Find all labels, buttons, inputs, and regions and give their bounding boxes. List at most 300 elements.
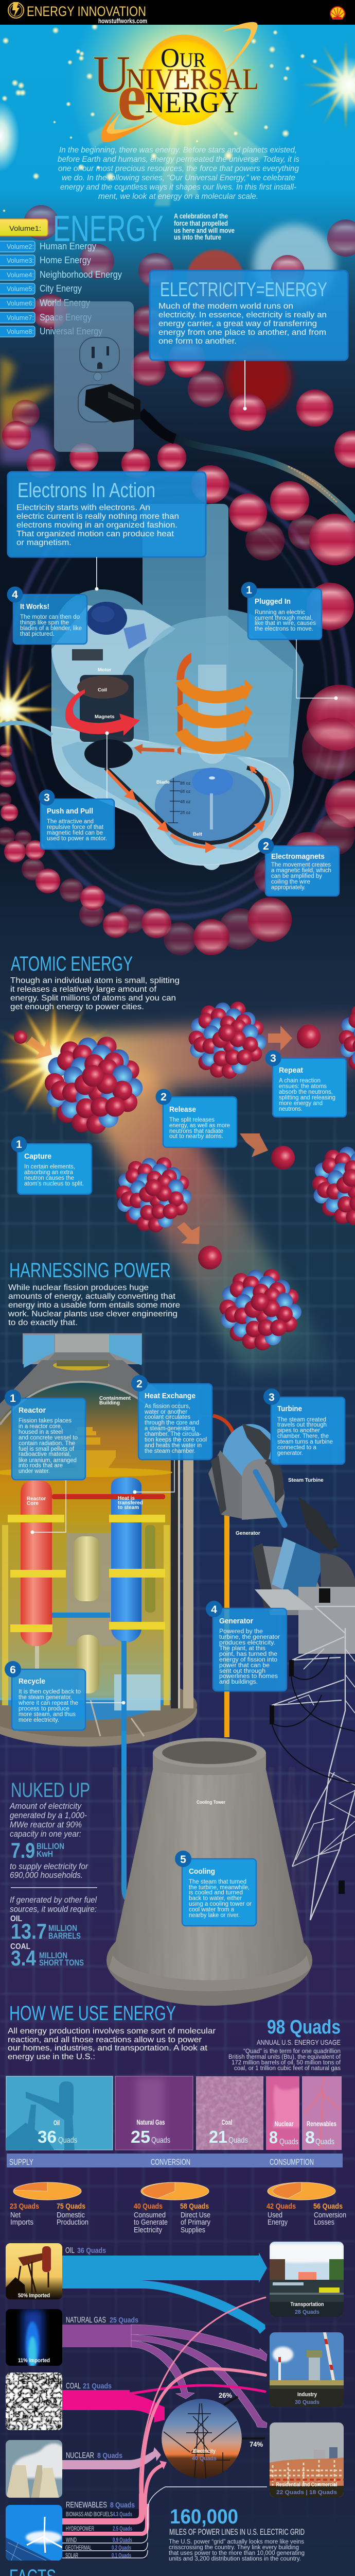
callout: turbine: connected to a [277, 1445, 317, 1451]
generator [252, 1497, 355, 1654]
callout: generator: produces electricity. [219, 1640, 275, 1646]
callout: plugged in: the electrons to move. [255, 626, 313, 632]
energy tagline: us into the future [174, 233, 221, 241]
blender illustration: 6fl oz [180, 789, 190, 794]
how we use energy text: reaction, and all those reactions allow us to power [8, 2036, 202, 2044]
callout: it works [7, 586, 87, 644]
callout: generator: power that can be [219, 1663, 270, 1669]
pie chart: consumption [267, 2182, 346, 2227]
callout: cooling: The steam that turned [189, 1879, 246, 1885]
callout: plugged in: 1 [246, 584, 252, 596]
intro text: ment, we look at energy on a molecular scale. [98, 192, 258, 201]
stat: 98 quads: 172 million barrels of oil, 50 million tons of [232, 2060, 341, 2066]
volume list: Volume6: [7, 299, 34, 307]
callout: generator: The plant, at this [219, 1646, 265, 1652]
photo: electricity: 74% [250, 2440, 263, 2448]
panel: electrons in action: Electrons In Action [17, 479, 155, 502]
volume list: Volume3: [7, 257, 34, 264]
callout: electromagnets: Electromagnets [271, 852, 325, 861]
intro text [58, 146, 299, 201]
plant part labels: Steam Turbine [288, 1478, 324, 1483]
intro text: before Earth and humans, energy permeated the universe. Today, it is [58, 155, 299, 164]
panel: nuked up: COAL [10, 1942, 30, 1951]
photo: residential and commercial: Residential and Commercial [276, 2482, 338, 2488]
atomic energy text [10, 976, 180, 1011]
orange coil arrows [176, 653, 253, 752]
nucleus 2 [188, 1002, 267, 1079]
callout: generator: powerlines to homes [219, 1673, 278, 1680]
callout: turbine: travels out through [277, 1422, 327, 1428]
blender part labels: Magnets [95, 714, 115, 720]
title text: NERGY [145, 86, 239, 119]
volume list: Space Energy [40, 312, 92, 323]
blender part labels: Blade [156, 779, 170, 785]
panel: electrons in action: electrons moving in an organized fashion. [16, 521, 177, 530]
callout: cooling: the turbine, meanwhile, [189, 1885, 250, 1891]
panel: electrons in action: Electricity starts with electrons. An [16, 503, 150, 512]
plant part labels: Reactor [27, 1496, 46, 1502]
renewables breakdown labels: BIOMASS AND BIOFUELS [66, 2511, 113, 2518]
label: cooling tower: Cooling Tower [197, 1800, 225, 1805]
callout: push and pull: repulsive force of that [47, 824, 104, 831]
callout: turbine: chamber. There, the [277, 1433, 329, 1439]
pie chart: supply [10, 2182, 88, 2227]
panel: electrons in action: electric current is really nothing more than [16, 512, 179, 521]
atomic energy text: get enough energy to power cities. [10, 1003, 144, 1011]
icon: energy innovation logo [8, 2, 24, 18]
volume list: Human Energy [40, 241, 96, 251]
bar: renewables: Renewables [307, 2120, 336, 2128]
bar: oil: 36 [38, 2127, 57, 2146]
photo: gas flame [6, 2309, 62, 2369]
flow: oil [62, 2252, 267, 2334]
heading: atomic energy: ATOMIC ENERGY [11, 953, 133, 975]
wire arc copper strands [288, 466, 337, 502]
callout: reactor: like uranium, arranged [19, 1458, 77, 1464]
how we use energy text: energy use in the U.S.: [8, 2053, 95, 2061]
neutron incoming [14, 1030, 27, 1044]
callout: repeat: A chain reaction [279, 1078, 321, 1084]
volume list: Home Energy [40, 255, 91, 265]
bar: coal: Quads [228, 2136, 248, 2145]
title text: O [161, 43, 180, 73]
callout: push and pull [39, 789, 114, 849]
harnessing power text: While nuclear fission produces huge [8, 1283, 149, 1292]
callout: capture: neutron causes the [24, 1175, 74, 1181]
renewables breakdown labels: GEOTHERMAL [65, 2544, 92, 2551]
harnessing power text: amounts of energy, actually converting that [8, 1292, 176, 1301]
callout: repeat: 3 [270, 1053, 276, 1064]
category band [7, 2154, 343, 2167]
stat: 98 quads: British thermal units (Btu), the equivalent of [228, 2054, 341, 2060]
flow: nuclear [62, 2447, 161, 2469]
blender part labels [95, 667, 203, 837]
title text: UR [180, 48, 206, 72]
stat: 98 quads: “Quad” is the term for one quadrillion [243, 2048, 341, 2055]
title text: NIVERSAL [126, 62, 259, 96]
bar: nuclear [266, 2076, 304, 2150]
energy tagline: A celebration of the [174, 212, 228, 220]
volume list: Neighborhood Energy [40, 269, 122, 280]
photo: electricity: 40 Quads [192, 2455, 217, 2462]
photo: transportation: 28 Quads [295, 2309, 319, 2315]
plant part labels: Core [27, 1501, 39, 1506]
photo: coal [6, 2372, 62, 2430]
photo: oil well [6, 2243, 62, 2299]
callout: recycle: Recycle [19, 1677, 45, 1686]
pie chart: conversion: Electricity [134, 2226, 162, 2234]
photo: electricity: Electricity [193, 2448, 216, 2454]
volume list: City Energy [40, 283, 82, 294]
panel: nuked up: 7.9 [11, 1838, 35, 1862]
header bar: howstuffworks.com [98, 17, 147, 25]
renewables breakdown labels: 0.1 Quads [112, 2552, 131, 2559]
bar: oil: Oil [54, 2119, 60, 2127]
photo: residential and commercial: 22 Quads | 18 Quads [276, 2489, 337, 2496]
sankey source labels: RENEWABLES [66, 2501, 107, 2510]
callout: reactor: under water. [19, 1468, 50, 1475]
panel: electrons in action: That organized motion can produce heat [16, 530, 174, 538]
callout: electromagnets [258, 838, 339, 896]
blender part labels: Coil [98, 687, 107, 693]
leader line to wire [296, 639, 338, 700]
callout: it works: blades of a blender, like [20, 625, 82, 632]
leader line to reactor core [31, 1480, 66, 1534]
stat: 160,000 miles of power lines: crisscrossing the country. They link every building [169, 2545, 299, 2551]
callout: generator: point, has turned the [219, 1651, 277, 1657]
panel: electricity=energy: Much of the modern world runs on [158, 302, 293, 311]
callout: turbine [263, 1388, 345, 1464]
callout: recycle: more steam, and thus [19, 1711, 76, 1718]
panel: electricity=energy: electricity. In essence, electricity is really an [158, 311, 327, 319]
callout: cooling: cool water from a [189, 1907, 235, 1913]
chain reaction light bands [51, 1018, 355, 1370]
panel: nuked up [9, 1779, 97, 1970]
cord and spark [0, 657, 59, 761]
bar: natural gas [115, 2076, 193, 2150]
callout: cooling [175, 1851, 256, 1926]
callout: generator: energy of fission into [219, 1657, 277, 1663]
sankey source labels: OIL [65, 2246, 75, 2255]
callout: push and pull: used to power a motor. [47, 836, 107, 842]
callout: electromagnets: 2 [263, 840, 269, 852]
callout: electromagnets: The movement creates [271, 862, 331, 868]
callout: it works: 4 [12, 589, 18, 601]
callout: repeat: splitting and releasing [279, 1095, 335, 1101]
callout: heat exchange: the steam chamber. [145, 1448, 196, 1454]
callout: reactor: housed in a steel [19, 1429, 63, 1435]
bar: oil: Quads [58, 2136, 77, 2145]
leader line to steam generator [133, 1460, 174, 1494]
callout: turbine: pipes to another [277, 1428, 320, 1434]
how we use energy text: our homes, industries, and transportation. A look at [8, 2044, 208, 2053]
callout: heat exchange: coolant circulates [145, 1414, 190, 1420]
category band: SUPPLY [9, 2157, 33, 2167]
panel: nuked up: 690,000 households. [10, 1870, 83, 1880]
leader line to pipe [85, 1701, 126, 1704]
renewables breakdown labels: 2.5 Quads [113, 2525, 132, 2532]
pie chart: supply: 23 Quads [10, 2202, 39, 2211]
header bar: ENERGY INNOVATION [27, 4, 146, 19]
callout: repeat: neutrons. [279, 1106, 303, 1112]
callout: turbine: 3 [269, 1392, 275, 1403]
pie chart: conversion: 58 Quads [180, 2202, 209, 2211]
renewables breakdown labels: 4.3 Quads [113, 2511, 132, 2518]
plant part labels: Generator [236, 1531, 260, 1536]
volume list: Volume1: [9, 224, 41, 232]
callout: reactor: into rods that are [19, 1463, 63, 1469]
colored light at left edge [0, 355, 57, 464]
callout: heat exchange: As fission occurs, [145, 1403, 190, 1410]
photo: gas flame: 11% Imported [18, 2358, 50, 2364]
nucleus 3 [339, 1001, 355, 1078]
sankey source labels: 8 Quads [110, 2501, 135, 2510]
callout: reactor: Reactor [19, 1406, 46, 1415]
callout: heat exchange: and heats the water in [145, 1443, 202, 1449]
panel: electricity=energy: energy carrier, a great way of transferring [158, 319, 317, 328]
plant part labels: Building [99, 1400, 120, 1406]
renewables breakdown labels: WIND [66, 2536, 77, 2544]
sankey source labels: NATURAL GAS [66, 2316, 106, 2325]
callout: electromagnets: a magnetic field, which [271, 868, 331, 874]
transmission tower [270, 1606, 355, 1920]
bar: natural gas: Natural Gas [137, 2118, 165, 2126]
leader line to magnets [105, 732, 109, 799]
nucleus 1 [45, 1037, 143, 1134]
bar: oil [6, 2076, 113, 2154]
bar: coal: Coal [221, 2118, 233, 2126]
pie chart: supply: Net [10, 2211, 21, 2219]
heading: harnessing power: HARNESSING POWER [9, 1259, 171, 1282]
steam generator and reactor vessels [74, 1536, 100, 1601]
nucleus 5 [312, 1146, 355, 1225]
blender illustration: 2fl oz [180, 810, 190, 815]
callout: capture: absorbing an extra [24, 1170, 74, 1176]
plant part labels: Containment [99, 1396, 131, 1401]
sankey diagram flows [62, 2252, 267, 2559]
callout: reactor: contain radiation. The [19, 1440, 75, 1447]
bar: natural gas: 25 [131, 2127, 150, 2146]
arrows and neutrons of chain reaction [177, 1025, 321, 1269]
sankey source labels: 8 Quads [97, 2451, 122, 2460]
photo: industry: Industry [297, 2392, 317, 2398]
callout: it works: things like spin the [20, 620, 69, 626]
callout: generator: turbine, the generator [219, 1634, 280, 1640]
arrow: neutron hits nucleus [27, 1037, 52, 1059]
callout: heat exchange: chamber. The circula- [145, 1431, 201, 1437]
callout: repeat: more energy and [279, 1100, 323, 1107]
stars [2, 23, 317, 212]
callout: heat exchange: a steam-generating [145, 1426, 195, 1432]
panel: electrons in action: or magnetism. [16, 538, 72, 547]
callout: generator: sent out through [219, 1668, 265, 1674]
callout: reactor: and concrete vessel to [19, 1435, 78, 1441]
callout: reactor: in a reactor core, [19, 1423, 62, 1430]
steam and water pipes [213, 1416, 233, 1737]
background grid [1, 1113, 354, 2407]
callout: turbine: generator. [277, 1450, 303, 1456]
volume list: Volume2: [7, 243, 34, 250]
steam turbine [208, 1423, 285, 1525]
pie chart: conversion: Direct Use [181, 2211, 210, 2219]
callout: recycle: more electricity. [19, 1717, 59, 1723]
title text: e [117, 60, 146, 134]
harnessing power text: energy into a usable form entails some more [8, 1301, 180, 1310]
icon: wall outlet with plug [54, 301, 355, 520]
callout: generator: and buildings. [219, 1679, 258, 1685]
bar: nuclear: Nuclear [275, 2120, 294, 2128]
callout: reactor: 1 [10, 1393, 16, 1404]
icon: shell logo [330, 7, 345, 19]
callout: recycle: process to produce [19, 1706, 69, 1712]
renewables breakdown labels: SOLAR [65, 2552, 78, 2559]
pie chart: conversion: Supplies [181, 2226, 205, 2234]
nucleus 4 [116, 1157, 191, 1232]
halo rings around the blender [5, 474, 350, 917]
photo: oil well: 50% Imported [18, 2293, 50, 2299]
heading: how we use energy: HOW WE USE ENERGY [9, 2002, 176, 2025]
callout: electromagnets: appropriately. [271, 885, 306, 891]
callout: generator: Powered by the [219, 1629, 263, 1635]
callout: generator: 4 [211, 1604, 217, 1616]
stat: 160,000 miles of power lines: that uses power to the more than 10,000 generating [169, 2550, 305, 2556]
harnessing power text: work. Nuclear plants use clever engineering [8, 1310, 177, 1318]
callout: capture: atom’s nucleus to split. [24, 1181, 84, 1187]
bar: renewables: 8 [305, 2128, 315, 2147]
bar: natural gas: Quads [151, 2136, 170, 2145]
sankey source labels: 25 Quads [110, 2316, 138, 2325]
callout: plugged in: current through metal, [255, 615, 313, 621]
callout: turbine: steam turns a turbine [277, 1439, 333, 1445]
renewables breakdown labels: 0.9 Quads [113, 2536, 132, 2544]
volume list: Volume7: [7, 314, 34, 321]
pie chart: supply: Production [57, 2218, 88, 2227]
callout: recycle: 6 [10, 1664, 16, 1676]
panel: electrons in action [8, 472, 206, 557]
header bar [0, 0, 355, 25]
pie chart: supply: 75 Quads [57, 2202, 85, 2211]
callout: capture: Capture [24, 1152, 51, 1161]
harnessing power text: to do exactly that. [8, 1318, 78, 1327]
callout: recycle: It is then cycled back to [19, 1689, 81, 1695]
panel: nuked up: 3.4 [11, 1946, 37, 1970]
callout: it works: It Works! [20, 602, 49, 611]
pie chart: supply: Imports [10, 2218, 33, 2227]
photo: transportation [270, 2242, 344, 2317]
photo: nuclear towers [6, 2440, 64, 2499]
atomic energy text: Though an individual atom is small, splitting [10, 976, 180, 985]
stat: 98 quads [228, 2016, 341, 2072]
blender part labels: Motor [98, 667, 112, 673]
intro text: one of our most precious resources, the force that powers everything [58, 164, 299, 173]
title logo: sun and rings [93, 22, 259, 142]
callout: cooling: Cooling [189, 1867, 215, 1876]
pie chart: consumption: Conversion [314, 2211, 346, 2219]
callout: heat exchange: 2 [136, 1378, 143, 1390]
callout: turbine: The steam created [277, 1417, 326, 1423]
bar chart: energy sources [6, 2076, 342, 2154]
callout: release: neutrons that radiate [169, 1128, 223, 1134]
photo: electricity: 26% [219, 2391, 233, 2399]
sankey source labels [65, 2246, 138, 2510]
callout: release: energy, as well as more [169, 1123, 230, 1129]
stat: 160,000 miles of power lines [169, 2505, 305, 2562]
energy tagline [174, 213, 235, 240]
callout: reactor: radioactive material, [19, 1451, 71, 1458]
volume list: World Energy [40, 298, 90, 308]
bar: nuclear: Quads [279, 2138, 298, 2146]
callout: heat exchange: Heat Exchange [145, 1392, 196, 1400]
callout: cooling: 5 [180, 1854, 186, 1866]
panel: nuked up: 13.7 [11, 1919, 47, 1943]
callout: release: out to nearby atoms. [169, 1133, 223, 1140]
panel: electricity=energy: energy from one place to another, and from [158, 328, 326, 337]
callout: release: 2 [161, 1091, 167, 1103]
crane and dome top [53, 1360, 110, 1370]
photo: industry [270, 2332, 344, 2407]
callout: reactor [5, 1389, 85, 1480]
stat: 98 quads: coal, or 1 trillion cubic feet of natural gas [234, 2065, 341, 2072]
bar: coal [196, 2076, 263, 2150]
nucleus 6 [220, 1269, 301, 1350]
callout: recycle: where it can repeat the [18, 1700, 78, 1706]
panel: electricity=energy [150, 270, 348, 360]
volume list: Volume4: [7, 271, 34, 279]
stat: 98 quads: 98 Quads [267, 2016, 341, 2038]
bar: coal: 21 [209, 2127, 227, 2146]
callout: cooling: nearby lake or river. [189, 1912, 240, 1919]
intro text: energy and the countless ways it shapes our lives. In this first install- [60, 183, 296, 192]
harnessing power text [8, 1283, 180, 1327]
volume list: Universal Energy [40, 326, 102, 336]
callout: push and pull: The attractive and [47, 819, 94, 825]
panel: nuked up: If generated by other fuel [10, 1895, 97, 1905]
flow: natural gas [62, 2325, 267, 2428]
how we use energy text [8, 2027, 216, 2061]
title text [94, 48, 257, 121]
cooling tower [106, 1738, 312, 2006]
callout: release [155, 1089, 237, 1147]
photo: transportation: Transportation [290, 2301, 324, 2308]
bar: renewables: Quads [315, 2138, 334, 2146]
photo: industry: 30 Quads [295, 2399, 319, 2405]
plant part labels: transfered [118, 1500, 143, 1506]
blender illustration [51, 504, 304, 870]
stat: 160,000 miles of power lines: 160,000 [170, 2505, 238, 2528]
callout: push and pull: Push and Pull [47, 807, 93, 816]
pie chart: consumption: 56 Quads [313, 2202, 343, 2211]
pie chart: supply: Domestic [57, 2211, 85, 2219]
callout: plugged in: Running an electric [255, 609, 305, 616]
flow: coal [62, 2385, 265, 2422]
callout: turbine: Turbine [277, 1404, 302, 1413]
pie chart: consumption: Used [268, 2211, 282, 2219]
pie chart: conversion: 40 Quads [134, 2202, 163, 2211]
category band: CONVERSION [151, 2157, 190, 2167]
containment building illustration [0, 1333, 197, 1747]
callout: reactor: Fission takes places [19, 1418, 72, 1424]
callout: heat exchange [131, 1375, 212, 1460]
blender illustration: 4fl oz [180, 799, 190, 804]
thin renewable lines [62, 2487, 267, 2558]
volume list: Volume5: [7, 285, 34, 293]
volume list [0, 219, 122, 337]
callout: heat exchange: through the core and [145, 1420, 199, 1426]
atomic energy text: energy. Split millions of atoms and you can [10, 994, 176, 1003]
callout: plugged in: Plugged In [255, 597, 291, 606]
panel: nuked up: OIL [10, 1914, 22, 1923]
blender part labels: Belt [193, 832, 203, 837]
